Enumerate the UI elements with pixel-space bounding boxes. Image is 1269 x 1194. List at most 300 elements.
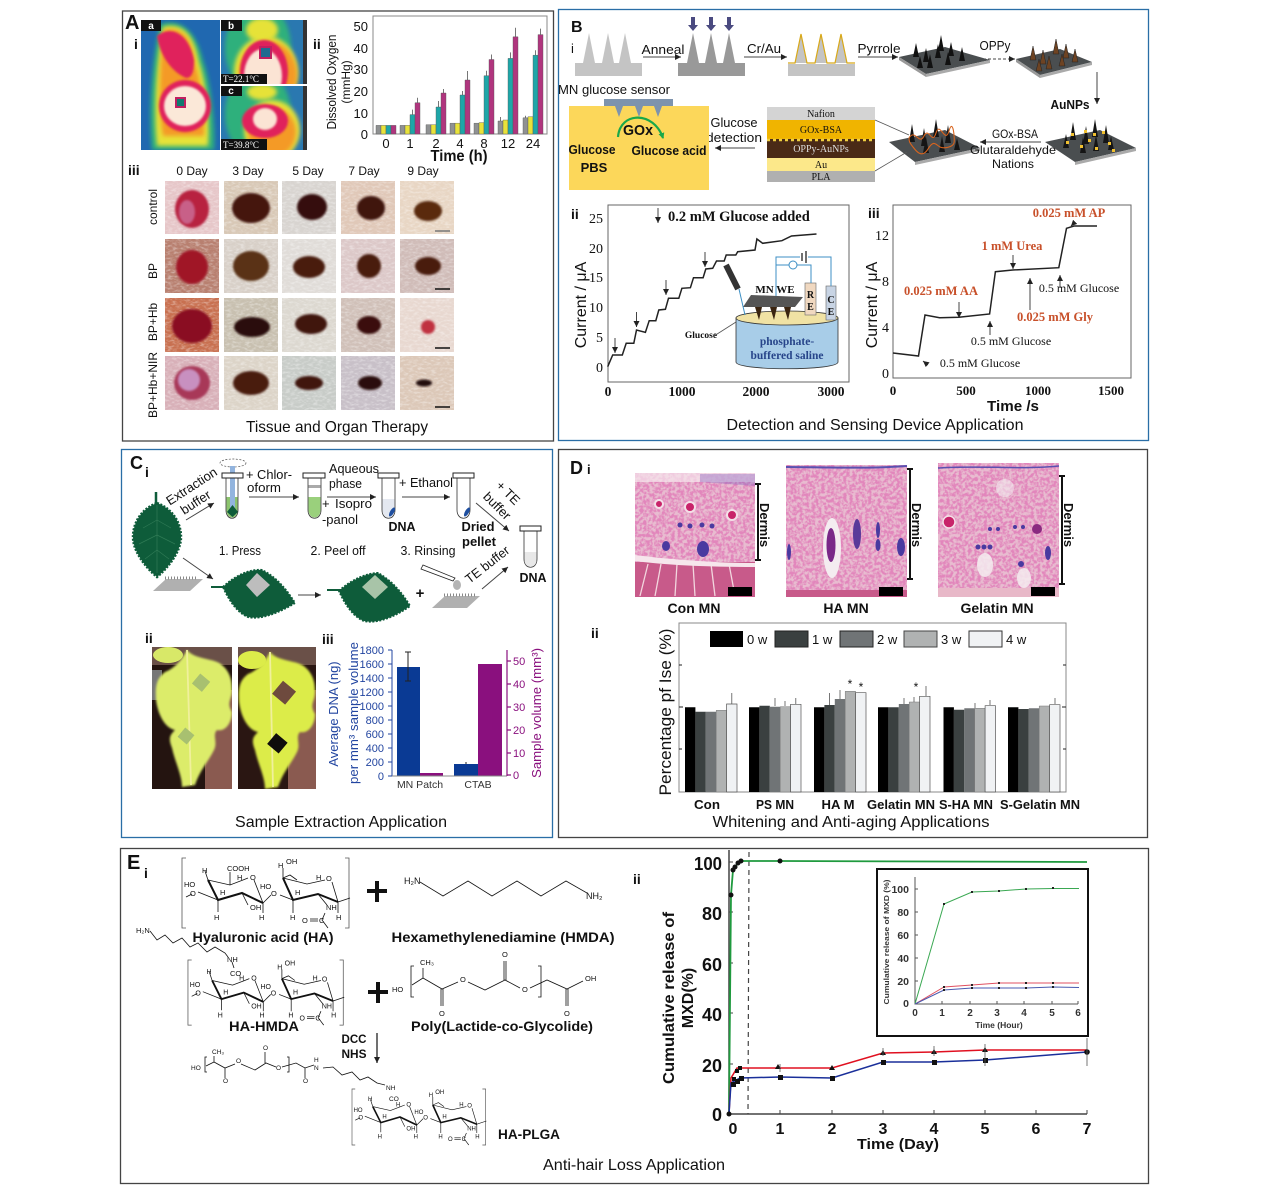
inset chart: 6: [1075, 1008, 1081, 1019]
HA-PLGA structure: HO: [414, 1110, 424, 1116]
label i: i: [144, 865, 148, 881]
dissolved oxygen bar chart: Dissolved Oxygen: [324, 34, 339, 130]
dissolved oxygen bar chart: 50: [354, 19, 368, 34]
inset chart: 0: [912, 1008, 918, 1019]
hyaluronic acid structure: H: [316, 873, 321, 882]
selectivity current chart: 4: [882, 321, 889, 336]
glucose current chart: 1000: [668, 384, 696, 399]
HA-PLGA structure: HO: [354, 1108, 363, 1114]
selectivity current chart: 1000: [1025, 383, 1051, 398]
histology Gelatin MN: Dermis: [1061, 503, 1076, 547]
HA-PLGA structure: NH: [467, 1127, 476, 1133]
panel C: sample extraction: [122, 450, 552, 838]
hyaluronic acid structure: H: [278, 861, 283, 870]
extraction protocol with tubes: -panol: [322, 512, 358, 527]
extraction protocol with tubes: Aqueous: [329, 461, 379, 476]
beaker inset: [685, 251, 838, 369]
label ii: ii: [633, 871, 641, 887]
DNA yield bar chart: 30: [513, 702, 525, 714]
HA-PLGA structure: HO: [191, 1065, 201, 1072]
beaker inset: Glucose: [685, 331, 717, 341]
HA-PLGA structure: CH₃: [212, 1049, 224, 1056]
DNA yield bar chart: 400: [366, 743, 384, 755]
hyaluronic acid structure: O: [190, 889, 196, 898]
inset chart: 0: [903, 998, 909, 1010]
label i: i: [587, 462, 591, 477]
HA-PLGA structure: O: [303, 1078, 308, 1085]
HA-HMDA structure: H₂N: [136, 926, 150, 935]
thermal image b: [221, 20, 307, 84]
microneedle fabrication steps: AuNPs: [1050, 97, 1090, 112]
layered electrode stack: Nafion: [807, 109, 835, 120]
HA-PLGA structure: O: [276, 1065, 281, 1072]
layered electrode stack: OPPy-AuNPs: [793, 144, 849, 155]
DNA yield bar chart: 50: [513, 656, 525, 668]
hyaluronic acid structure: H: [259, 913, 264, 922]
HA-PLGA structure: CO: [389, 1096, 399, 1103]
reaction arrow: DCC: [342, 1032, 367, 1046]
hyaluronic acid structure: O: [326, 874, 332, 883]
panel D: whitening and anti-aging: [558, 450, 1148, 838]
HA-PLGA structure: H: [438, 1135, 443, 1141]
extraction protocol with tubes: + Chlor-: [246, 467, 292, 482]
legend: [710, 631, 1027, 647]
HA-HMDA structure: OH: [285, 961, 295, 968]
legend: 1 w: [812, 632, 833, 647]
panel E caption: Anti-hair Loss Application: [543, 1157, 725, 1174]
inset chart: 5: [1049, 1008, 1055, 1019]
HA-PLGA structure: O: [236, 1058, 241, 1065]
beaker inset: R: [807, 290, 815, 301]
cumulative release line chart: 60: [702, 955, 722, 975]
patch press steps: [153, 542, 513, 622]
wound healing photo grid: control: [146, 189, 160, 225]
panel B: detection and sensing: [558, 10, 1148, 440]
label iii: iii: [128, 162, 140, 178]
microneedle fabrication steps: Nations: [992, 157, 1034, 171]
PLGA structure: OH: [585, 974, 596, 983]
HA-HMDA structure: HO: [190, 982, 201, 989]
hyaluronic acid structure: H: [220, 888, 225, 897]
dissolved oxygen bar chart: 40: [354, 41, 368, 56]
patch press steps: +: [416, 585, 425, 602]
HA-PLGA structure: H: [378, 1135, 382, 1141]
panel A: tissue and organ therapy: [122, 2, 554, 441]
beaker inset: E: [828, 307, 835, 318]
microneedle fabrication steps: Pyrrole: [858, 41, 900, 56]
cumulative release line chart: 0: [712, 1105, 722, 1125]
DNA yield bar chart: 1600: [360, 659, 384, 671]
hyaluronic acid structure: HO: [260, 882, 271, 891]
wound healing photo grid: BP: [146, 263, 160, 279]
skin lightening bar chart: *: [914, 680, 919, 694]
inset chart: 60: [897, 930, 909, 942]
DNA yield bar chart: 0: [513, 770, 519, 782]
DNA yield bar chart: 0: [378, 771, 384, 783]
thermal image a: a: [148, 21, 154, 32]
plus sign: [367, 881, 387, 902]
histology HA MN: [786, 465, 924, 616]
inset chart: Time (Hour): [975, 1020, 1023, 1030]
dissolved oxygen bar chart: 2: [432, 136, 440, 151]
extraction protocol with tubes: buffer: [178, 487, 214, 518]
microneedle fabrication steps: Glutaraldehyde: [970, 143, 1056, 157]
patch press steps: 1. Press: [219, 543, 261, 558]
PLGA structure: HO: [392, 985, 403, 994]
DNA yield bar chart: [326, 642, 544, 791]
HA-PLGA structure: H: [368, 1097, 372, 1103]
HA-HMDA structure: [136, 926, 344, 1034]
HA-PLGA structure: NH: [386, 1085, 396, 1092]
extraction protocol with tubes: buffer: [480, 489, 515, 523]
wound healing photo grid: 5 Day: [292, 164, 324, 178]
DNA yield bar chart: Average DNA (ng): [326, 661, 341, 767]
inset chart: Cumulative release of MXD (%): [882, 879, 891, 1004]
HA-HMDA structure: HA-HMDA: [229, 1018, 299, 1034]
HA-HMDA structure: H: [331, 1013, 336, 1020]
HA-HMDA structure: H: [313, 976, 318, 983]
extraction protocol with tubes: DNA: [520, 570, 547, 585]
DNA yield bar chart: CTAB: [464, 779, 492, 791]
HA-PLGA structure: OH: [435, 1090, 444, 1096]
hyaluronic acid structure: H: [237, 873, 242, 882]
thermal image c: c: [228, 86, 234, 97]
label ii: ii: [313, 36, 321, 52]
selectivity current chart: 1500: [1098, 383, 1124, 398]
extraction protocol with tubes: Dried: [462, 519, 495, 534]
HA-HMDA structure: O: [195, 990, 201, 997]
inset chart: 2: [967, 1008, 973, 1019]
skin lightening bar chart: *: [848, 677, 853, 691]
DNA yield bar chart: 1200: [360, 687, 384, 699]
selectivity current chart: 0.025 mM Gly: [1017, 310, 1094, 324]
dissolved oxygen bar chart: 30: [354, 62, 368, 77]
microneedle fabrication steps: OPPy: [980, 38, 1011, 53]
glucose current chart: 10: [589, 301, 603, 316]
glucose current chart: 20: [589, 242, 603, 257]
glucose current chart: 25: [589, 212, 603, 227]
HA-HMDA structure: H: [239, 976, 244, 983]
selectivity current chart: 0.5 mM Glucose: [971, 334, 1051, 348]
glucose current chart: 5: [596, 331, 603, 346]
legend: 3 w: [941, 632, 962, 647]
selectivity current chart: 0.5 mM Glucose: [940, 356, 1020, 370]
patch press steps: 2. Peel off: [310, 543, 366, 558]
extraction protocol with tubes: DNA: [388, 519, 416, 534]
selectivity current chart: 1 mM Urea: [982, 239, 1043, 253]
extraction protocol with tubes: +: [322, 496, 330, 511]
HA-PLGA structure: C: [462, 1137, 467, 1143]
MN glucose sensor diagram: GOx: [623, 122, 654, 139]
HA-HMDA structure: CO: [230, 969, 241, 978]
layered electrode stack: PLA: [812, 172, 831, 183]
MN glucose sensor diagram: Glucose acid: [632, 143, 707, 158]
layered electrode stack: Au: [815, 160, 827, 171]
selectivity current chart: 0: [890, 383, 896, 398]
hyaluronic acid structure: [182, 857, 350, 945]
cumulative release line chart: [661, 850, 1092, 1153]
wound healing photo grid: 7 Day: [348, 164, 380, 178]
panel letter B: B: [571, 19, 583, 36]
patch press steps: 3. Rinsing: [400, 543, 456, 558]
HA-HMDA structure: H: [218, 1013, 223, 1020]
hyaluronic acid structure: HO: [184, 880, 195, 889]
histology Con MN: Dermis: [757, 503, 772, 547]
hexamethylenediamine structure: NH₂: [586, 891, 603, 901]
histology Con MN: [635, 473, 772, 616]
glucose detection arrow: Glucose: [710, 116, 758, 130]
label i: i: [134, 36, 138, 52]
PLGA structure: O: [502, 950, 508, 959]
glucose current chart: 0: [605, 384, 612, 399]
HA-HMDA structure: O: [251, 976, 257, 983]
microneedle fabrication steps: GOx-BSA: [992, 129, 1038, 141]
MN glucose sensor diagram: PBS: [581, 160, 608, 175]
microneedle fabrication steps: Cr/Au: [747, 41, 781, 56]
cumulative release line chart: 100: [694, 854, 722, 874]
skin lightening bar chart: S-HA MN: [939, 797, 993, 812]
HA-HMDA structure: O: [300, 1015, 306, 1022]
beaker inset: buffered saline: [751, 350, 823, 362]
panel letter E: E: [127, 852, 140, 874]
HA-PLGA structure: O: [223, 1078, 228, 1085]
legend: 4 w: [1006, 632, 1027, 647]
selectivity current chart: 0.5 mM Glucose: [1039, 281, 1119, 295]
hyaluronic acid structure: O: [271, 889, 277, 898]
label i: i: [145, 464, 149, 480]
HA-HMDA structure: H: [288, 1013, 293, 1020]
panel letter D: D: [570, 458, 583, 478]
hyaluronic acid structure: C: [319, 916, 325, 925]
HA-PLGA structure: H: [414, 1135, 418, 1141]
HA-PLGA structure: HA-PLGA: [498, 1127, 560, 1142]
label ii: ii: [145, 630, 153, 646]
HA-HMDA structure: C: [315, 1015, 320, 1022]
hyaluronic acid structure: OH: [286, 857, 297, 866]
histology HA MN: Dermis: [909, 503, 924, 547]
HA-PLGA structure: H: [396, 1103, 400, 1109]
inset chart: [877, 869, 1088, 1036]
patch press steps: TE buffer: [462, 542, 513, 586]
skin lightening bar chart: [656, 623, 1080, 812]
beaker inset: phosphate-: [760, 336, 814, 348]
glucose current chart: Current / μA: [573, 261, 590, 348]
glucose current chart: [573, 205, 849, 399]
inset chart: 20: [897, 976, 909, 988]
hyaluronic acid structure: H: [290, 913, 295, 922]
cumulative release line chart: MXD(%): [680, 968, 697, 1028]
HA-PLGA structure: O: [263, 1045, 268, 1052]
glucose current chart: 0: [596, 361, 603, 376]
inset chart: 3: [994, 1008, 1000, 1019]
HA-PLGA structure: O: [406, 1103, 411, 1109]
dissolved oxygen bar chart: 0: [382, 136, 390, 151]
hyaluronic acid structure: H: [202, 866, 207, 875]
wound healing photo grid: 3 Day: [232, 164, 264, 178]
legend: 0 w: [747, 632, 768, 647]
hyaluronic acid structure: COOH: [227, 864, 250, 873]
cumulative release line chart: 5: [981, 1121, 990, 1138]
PLGA structure: O: [522, 985, 528, 994]
extraction protocol with tubes: Extraction: [163, 464, 220, 508]
skin lightening bar chart: Con: [694, 797, 720, 812]
panel D caption: Whitening and Anti-aging Applications: [712, 814, 990, 831]
DNA yield bar chart: 10: [513, 748, 525, 760]
extraction protocol with tubes: + TE: [493, 478, 523, 508]
thermal image c: T=39.8°C: [223, 140, 259, 150]
cumulative release line chart: 7: [1083, 1121, 1092, 1138]
PLGA structure: O: [439, 1009, 445, 1018]
cumulative release line chart: 40: [702, 1005, 722, 1025]
layered electrode stack: [767, 107, 909, 183]
selectivity current chart: 0.025 mM AP: [1033, 206, 1106, 220]
panel B caption: Detection and Sensing Device Application: [726, 417, 1024, 434]
panel C caption: Sample Extraction Application: [235, 814, 447, 831]
dissolved oxygen bar chart: 0: [361, 127, 368, 142]
histology Gelatin MN: Gelatin MN: [960, 600, 1034, 616]
glucose detection arrow: [706, 116, 762, 148]
HA-PLGA structure: O: [358, 1115, 363, 1121]
layered electrode stack: GOx-BSA: [800, 125, 843, 136]
HA-PLGA structure: H: [475, 1135, 480, 1141]
HA-HMDA structure: H: [260, 1013, 265, 1020]
cumulative release line chart: Cumulative release of: [661, 911, 678, 1084]
DNA yield bar chart: 1800: [360, 645, 384, 657]
cumulative release line chart: Time (Day): [857, 1136, 939, 1153]
HA-HMDA structure: H: [293, 989, 298, 996]
dissolved oxygen bar chart: 10: [354, 106, 368, 121]
dissolved oxygen bar chart: [324, 16, 547, 165]
wound healing photo grid: BP+Hb: [146, 302, 160, 341]
dissolved oxygen bar chart: 4: [456, 136, 464, 151]
skin lightening bar chart: PS MN: [756, 797, 794, 812]
HA-HMDA structure: HO: [261, 984, 272, 991]
beaker inset: C: [827, 295, 835, 306]
inset chart: 40: [897, 953, 909, 965]
DNA yield bar chart: per mm³ sample volume: [346, 642, 361, 784]
dissolved oxygen bar chart: (mmHg): [339, 60, 353, 104]
glucose current chart: 3000: [818, 384, 845, 399]
HA-PLGA structure: H: [459, 1103, 464, 1109]
inset chart: 4: [1021, 1008, 1027, 1019]
DNA yield bar chart: 1000: [360, 701, 384, 713]
hexamethylenediamine structure: Hexamethylenediamine (HMDA): [392, 929, 614, 945]
MN glucose sensor diagram: Glucose: [568, 142, 616, 157]
HA-PLGA structure: O: [448, 1137, 453, 1143]
glucose current chart: 2000: [742, 384, 770, 399]
hyaluronic acid structure: Hyaluronic acid (HA): [192, 929, 334, 945]
selectivity current chart: [864, 205, 1131, 415]
HA-PLGA structure: H: [382, 1115, 387, 1121]
HA-HMDA structure: O: [322, 976, 328, 983]
dissolved oxygen bar chart: 12: [501, 136, 515, 151]
HA-HMDA structure: O: [271, 990, 277, 997]
DNA yield bar chart: 200: [366, 757, 384, 769]
plus sign: [368, 982, 388, 1003]
HA-HMDA structure: H: [223, 989, 228, 996]
thermal image b: b: [228, 21, 234, 32]
hyaluronic acid structure: NH: [326, 903, 337, 912]
beaker inset: MN WE: [755, 284, 795, 296]
cumulative release line chart: 1: [776, 1121, 785, 1138]
PLGA structure: O: [460, 975, 466, 984]
selectivity current chart: 500: [956, 383, 976, 398]
panel E: anti-hair loss: [120, 848, 1148, 1184]
cumulative release line chart: 20: [702, 1056, 722, 1076]
DNA yield bar chart: 600: [366, 729, 384, 741]
HA-PLGA structure: H: [429, 1093, 433, 1099]
MN glucose sensor diagram: MN glucose sensor: [558, 82, 671, 97]
label i: i: [571, 41, 574, 56]
DNA yield bar chart: Sample volume (mm³): [529, 648, 544, 778]
inset chart: 1: [939, 1008, 945, 1019]
histology HA MN: HA MN: [823, 600, 869, 616]
inset chart: 80: [897, 907, 909, 919]
dissolved oxygen bar chart: 8: [480, 136, 488, 151]
MN glucose sensor diagram: [558, 82, 709, 190]
selectivity current chart: Time /s: [987, 398, 1039, 415]
histology Con MN: Con MN: [668, 600, 720, 616]
dissolved oxygen bar chart: 1: [406, 136, 414, 151]
cumulative release line chart: 80: [702, 904, 722, 924]
thermal image b: T=22.1°C: [223, 74, 259, 84]
thermal image a: [141, 20, 220, 150]
hyaluronic acid structure: OH: [250, 903, 261, 912]
PLGA structure: CH₃: [420, 958, 434, 967]
HA-HMDA structure: NH: [322, 1003, 332, 1010]
HA-HMDA structure: H: [207, 969, 212, 976]
skin lightening bar chart: Gelatin MN: [867, 797, 935, 812]
label ii: ii: [571, 206, 579, 222]
reaction arrow: NHS: [342, 1047, 366, 1061]
thermal image c: [221, 86, 307, 150]
skin lightening bar chart: S-Gelatin MN: [1000, 797, 1080, 812]
leaf sample: [133, 492, 181, 577]
histology Gelatin MN: [938, 463, 1076, 616]
selectivity current chart: 12: [875, 229, 889, 244]
HA-PLGA structure: OH: [406, 1127, 415, 1133]
hexamethylenediamine structure: [392, 876, 614, 945]
cumulative release line chart: 6: [1032, 1121, 1041, 1138]
hyaluronic acid structure: H: [214, 913, 219, 922]
selectivity current chart: Current / μA: [864, 261, 881, 348]
beaker inset: E: [807, 302, 814, 313]
extraction protocol with tubes: phase: [329, 476, 362, 491]
dissolved oxygen bar chart: 24: [526, 136, 540, 151]
cumulative release line chart: 2: [828, 1121, 837, 1138]
reaction arrow: [342, 1032, 377, 1063]
HA-PLGA structure: H: [442, 1115, 447, 1121]
extraction protocol with tubes: Isopro: [335, 496, 372, 511]
DNA yield bar chart: 1400: [360, 673, 384, 685]
glucose detection arrow: detection: [706, 131, 762, 145]
HA-HMDA structure: OH: [251, 1003, 262, 1010]
glucose current chart: 15: [589, 271, 603, 286]
panel letter C: C: [130, 453, 143, 473]
leaf photo before: [152, 647, 232, 789]
extraction protocol with tubes: oform: [247, 480, 281, 495]
dissolved oxygen bar chart: Time (h): [430, 148, 488, 165]
cumulative release line chart: 0: [729, 1121, 738, 1138]
HA-PLGA structure: O: [467, 1103, 472, 1109]
HA-HMDA structure: NH: [227, 955, 238, 964]
HA-PLGA structure: O: [423, 1115, 428, 1121]
hyaluronic acid structure: O: [302, 916, 308, 925]
DNA yield bar chart: MN Patch: [397, 779, 443, 791]
label iii: iii: [322, 631, 334, 647]
extraction protocol with tubes: pellet: [462, 534, 497, 549]
panel letter A: A: [125, 12, 139, 34]
